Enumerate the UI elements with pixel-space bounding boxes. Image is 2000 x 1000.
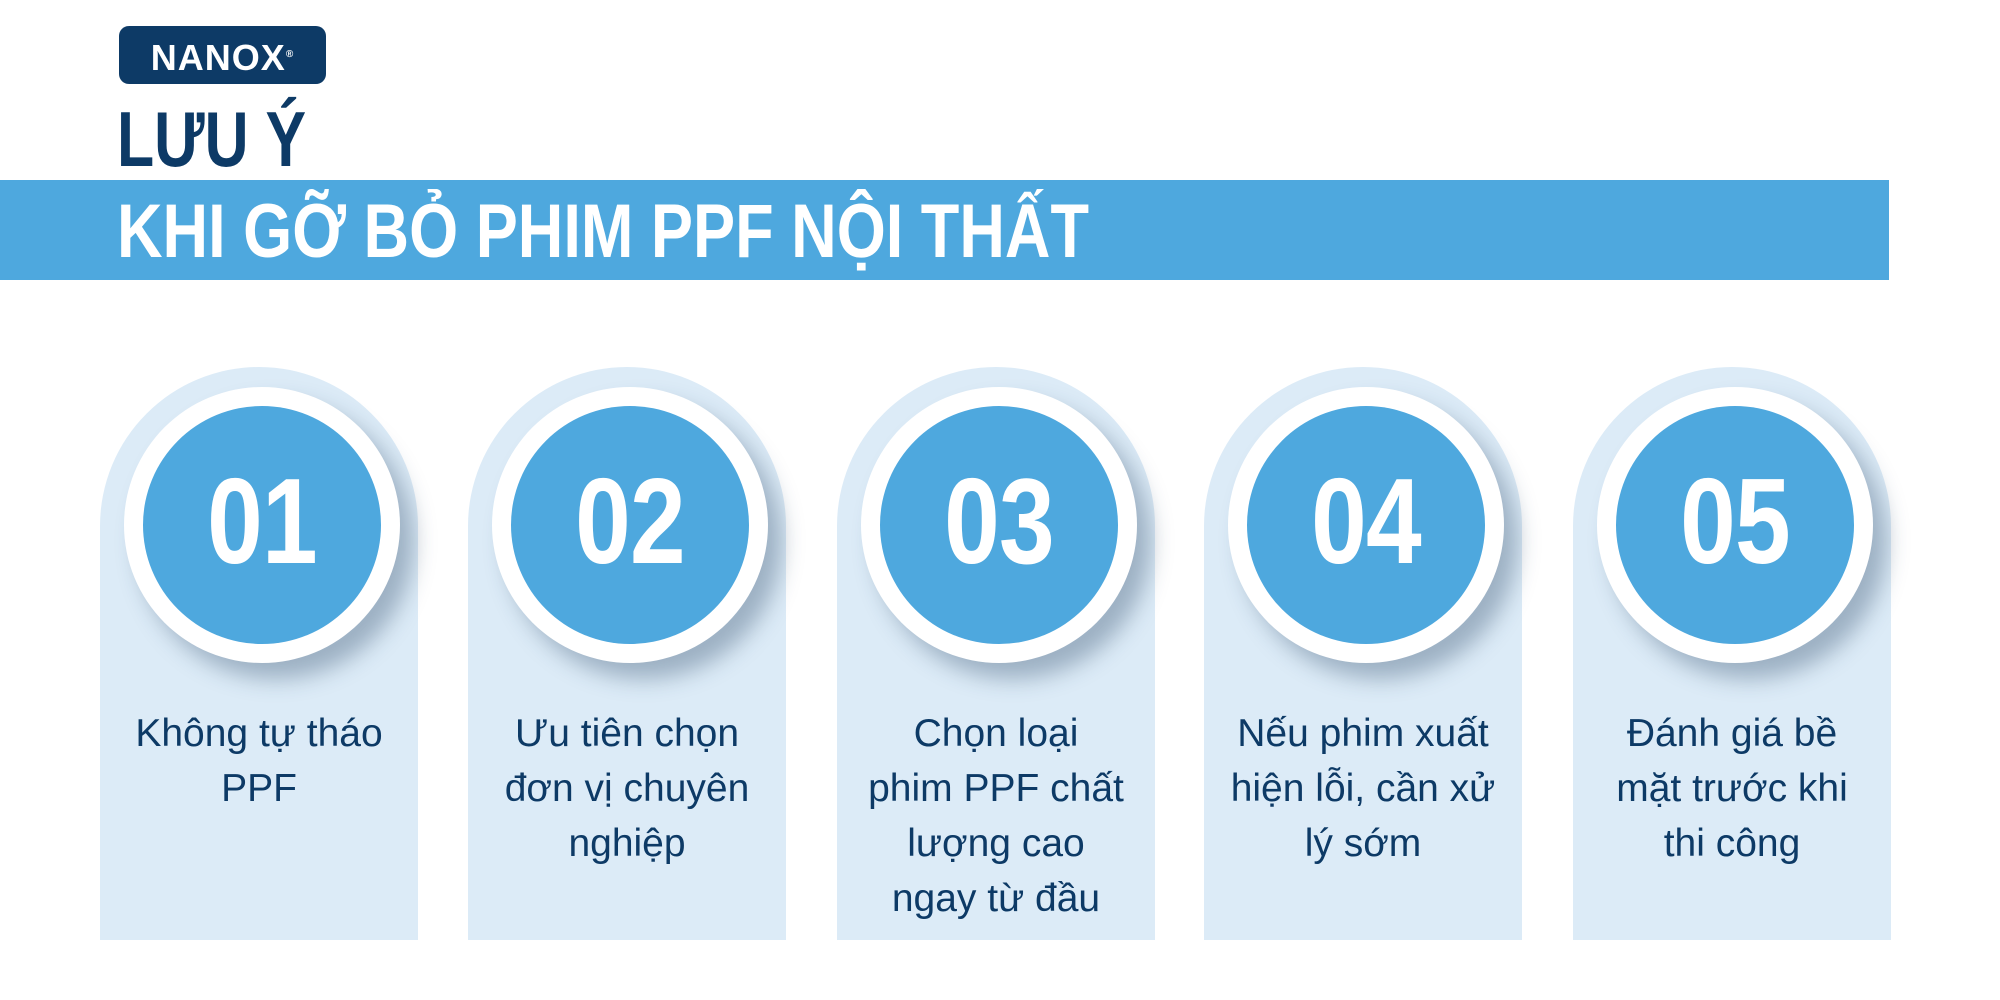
card 01 (100, 367, 418, 940)
text 04: hiện lỗi, cần xử (1231, 767, 1495, 810)
text 02: nghiệp (568, 822, 686, 865)
circle 05 (1597, 387, 1873, 663)
text 02: đơn vị chuyên (505, 767, 749, 810)
logo: NANOX® (151, 37, 294, 78)
circle 03: 03 (944, 453, 1054, 589)
text 01: Không tự tháo (135, 712, 383, 755)
text 02: Ưu tiên chọn (515, 712, 739, 755)
title text: KHI GỠ BỎ PHIM PPF NỘI THẤT (117, 189, 1089, 274)
text 03: Chọn loại (914, 712, 1078, 755)
text 02 (505, 712, 749, 865)
text 05: Đánh giá bề (1627, 712, 1837, 755)
circle 02: 02 (575, 453, 685, 589)
text 03: ngay từ đầu (892, 877, 1100, 920)
logo (119, 26, 326, 84)
title band (0, 180, 1889, 280)
text 04: lý sớm (1305, 822, 1421, 865)
circle 04 (1228, 387, 1504, 663)
circle 01 (124, 387, 400, 663)
text 03: phim PPF chất (868, 767, 1124, 810)
text 04: Nếu phim xuất (1237, 712, 1489, 755)
text 05: mặt trước khi (1616, 767, 1848, 810)
text 01 (135, 712, 383, 810)
text 03: lượng cao (907, 822, 1085, 865)
circle 01: 01 (207, 453, 317, 589)
text 03 (868, 712, 1124, 920)
text 05: thi công (1664, 822, 1800, 865)
text 04 (1231, 712, 1495, 865)
text 05 (1616, 712, 1848, 865)
card 02 (468, 367, 786, 940)
circle 02 (492, 387, 768, 663)
circle 04: 04 (1311, 453, 1421, 589)
heading: LƯU Ý: LƯU Ý (117, 95, 306, 183)
card 05 (1573, 367, 1891, 940)
circle 05: 05 (1680, 453, 1790, 589)
circle 03 (861, 387, 1137, 663)
card 03 (837, 367, 1155, 940)
card 04 (1204, 367, 1522, 940)
text 01: PPF (221, 767, 297, 810)
